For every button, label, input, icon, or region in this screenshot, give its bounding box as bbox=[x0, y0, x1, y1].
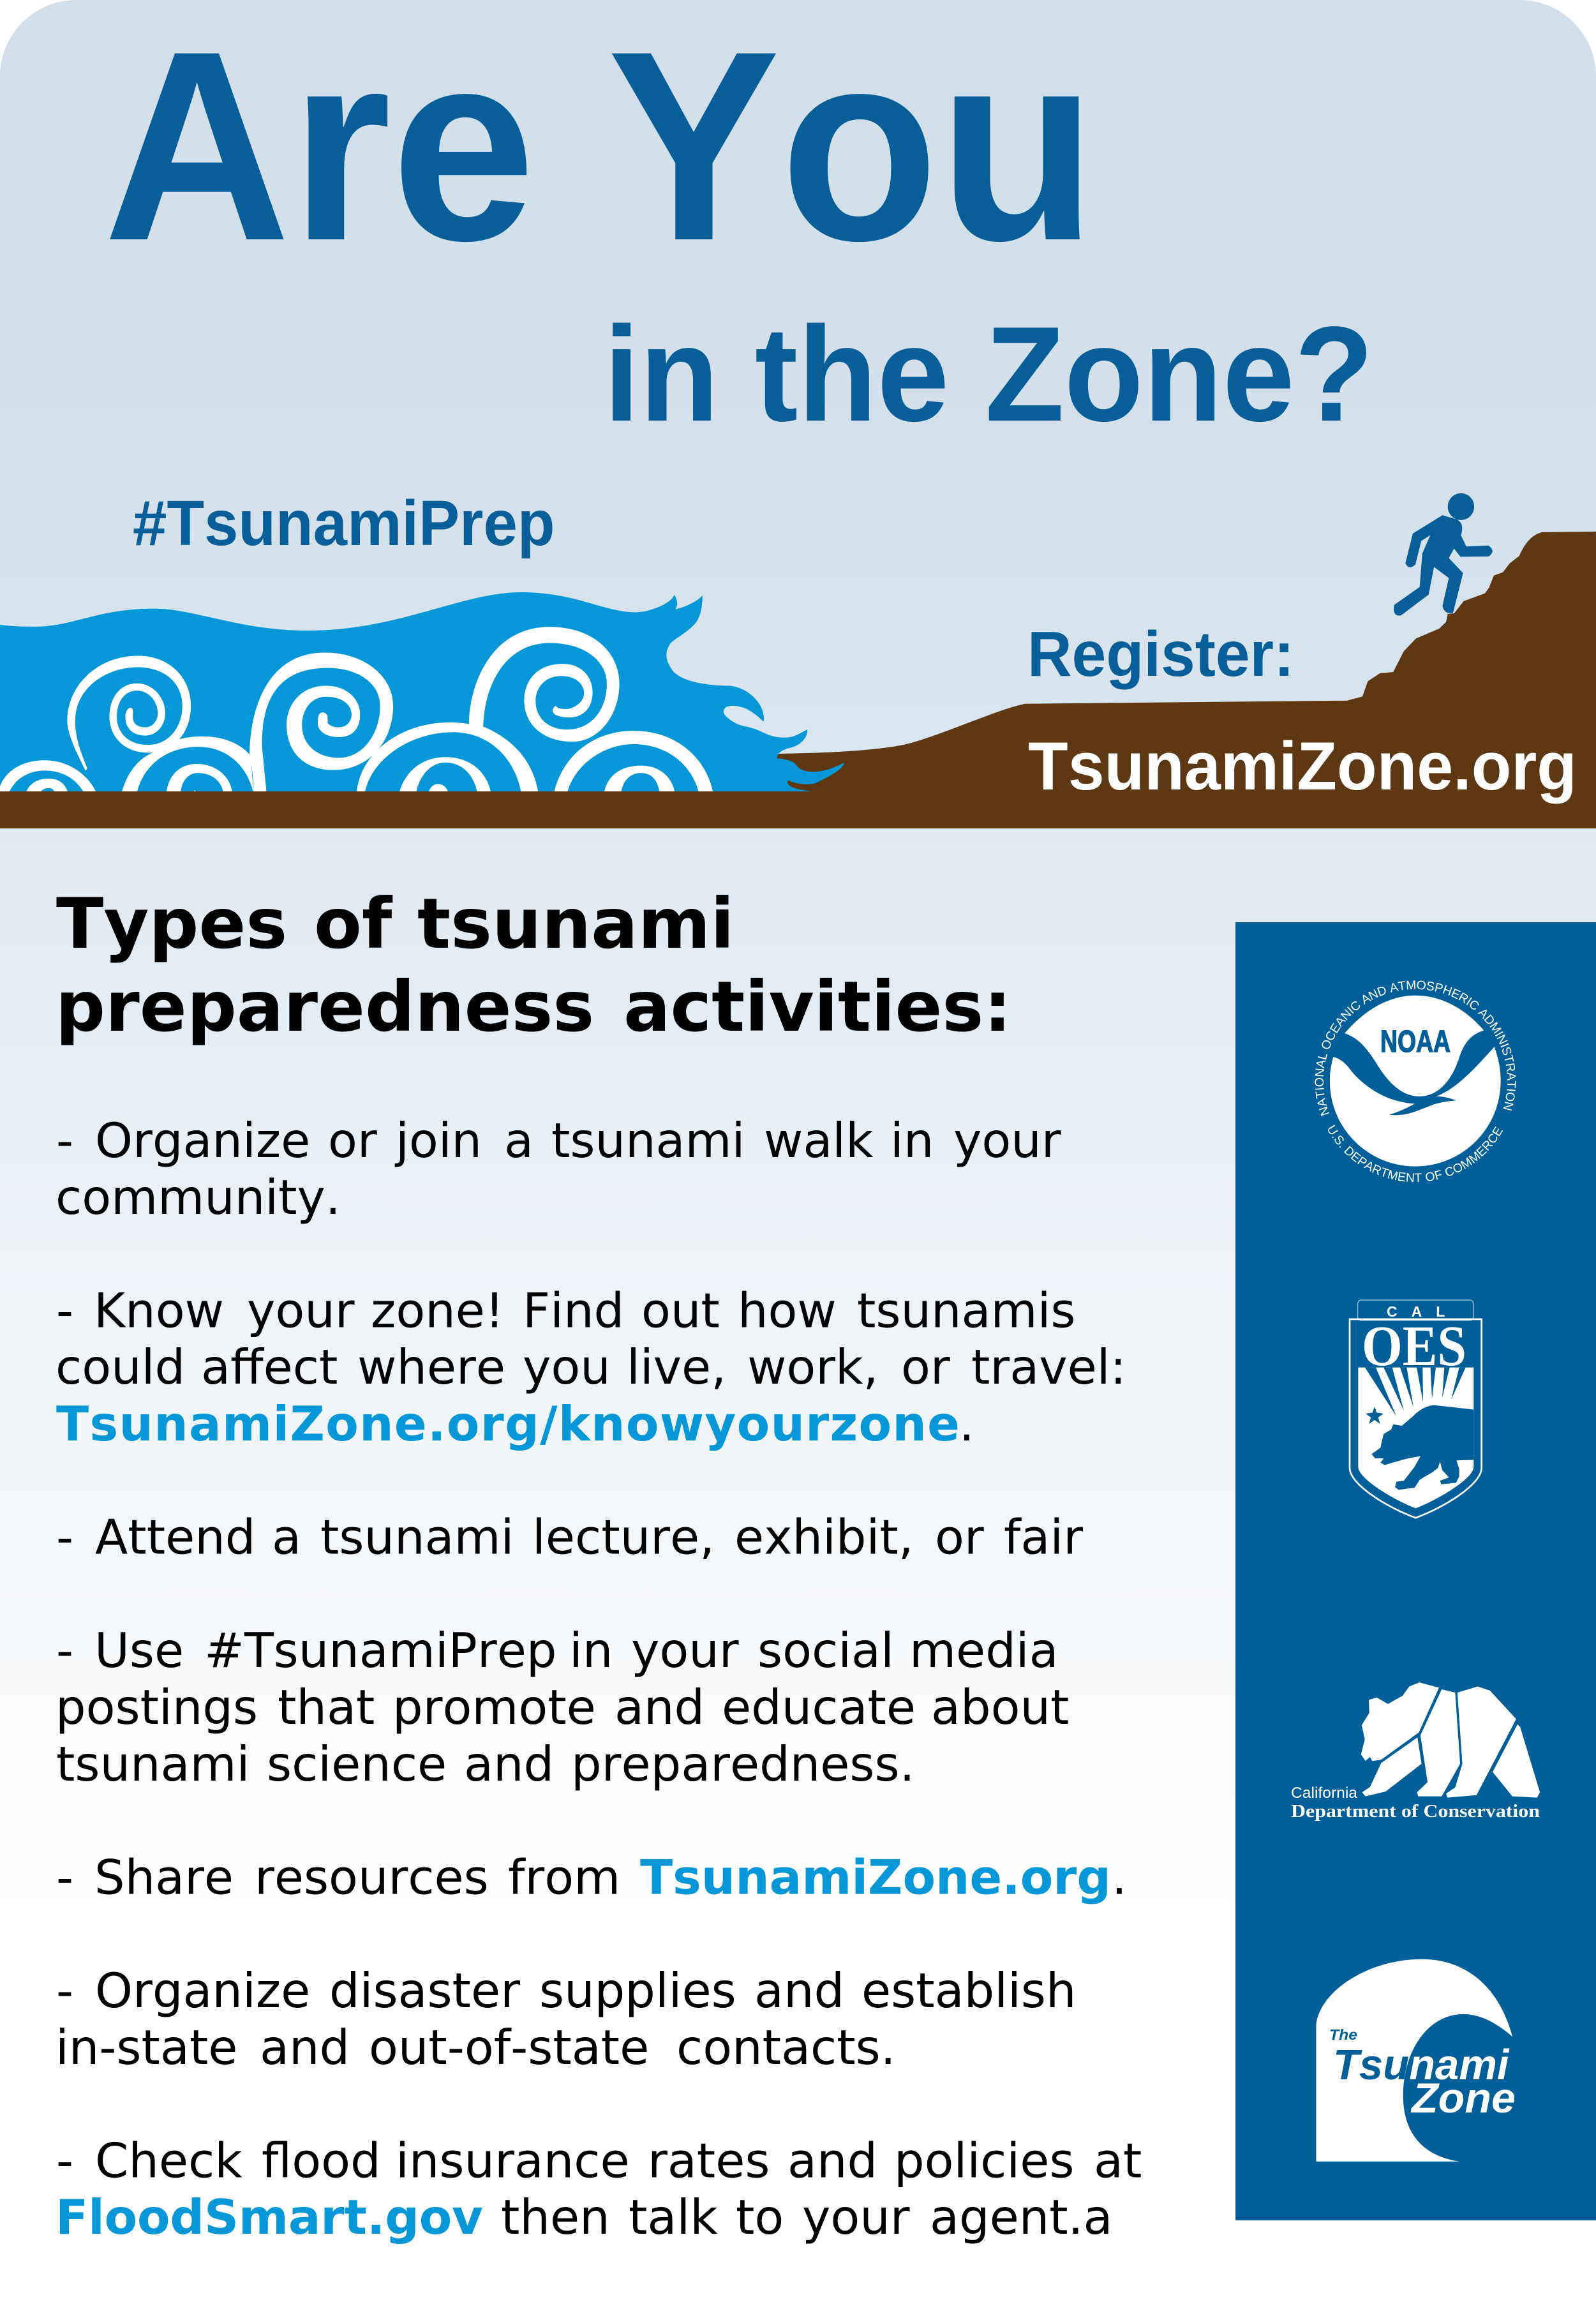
logo: The Tsunami Zone: Zone bbox=[1410, 2074, 1516, 2121]
activity: social media: media bbox=[909, 1622, 1059, 1679]
logo: The Tsunami Zone: The bbox=[1329, 2026, 1357, 2043]
activity: know your zone: live, bbox=[627, 1339, 726, 1395]
activity: social media: promote bbox=[392, 1679, 596, 1735]
activity: tsunami walk: Organize bbox=[95, 1112, 310, 1169]
activity: social media: preparedness. bbox=[571, 1736, 914, 1792]
title: in the Zone?: in the Zone? bbox=[604, 298, 1374, 449]
activity: know your zone: your bbox=[247, 1282, 355, 1338]
activity: social media bbox=[56, 1622, 1069, 1792]
activity: flood insurance bbox=[56, 2132, 1142, 2245]
activity: social media: and bbox=[464, 1736, 554, 1792]
activity: social media: in bbox=[569, 1622, 613, 1679]
activity: tsunami walk: join bbox=[394, 1112, 482, 1169]
activity: flood insurance: FloodSmart.gov bbox=[56, 2189, 483, 2245]
activity: social media: Use bbox=[94, 1622, 184, 1679]
activity: disaster supplies: in-state bbox=[56, 2019, 237, 2075]
activity: know your zone: tsunamis bbox=[857, 1282, 1075, 1338]
activity: social media: postings bbox=[56, 1679, 258, 1735]
logo: The Tsunami Zone bbox=[1316, 1959, 1516, 2162]
logo: NOAA: NATIONAL OCEANIC AND ATMOSPHERIC ADMINISTRATION bbox=[1315, 980, 1516, 1116]
activity: flood insurance: then bbox=[501, 2189, 610, 2245]
activity: share resources: from bbox=[508, 1849, 620, 1905]
heading: types of activities: Types bbox=[56, 883, 287, 964]
icon: running person bbox=[1394, 493, 1493, 615]
activity: disaster supplies bbox=[56, 1963, 1076, 2075]
activity: disaster supplies: - bbox=[56, 1963, 73, 2019]
activity: social media: social bbox=[757, 1622, 894, 1679]
activity: tsunami walk: a bbox=[504, 1112, 533, 1169]
activity: lecture or fair: Attend bbox=[95, 1509, 255, 1566]
activity: know your zone: zone! bbox=[371, 1282, 504, 1338]
activity: tsunami walk: in bbox=[890, 1112, 934, 1169]
activity: flood insurance: to bbox=[736, 2189, 784, 2245]
activity: know your zone: where bbox=[357, 1339, 505, 1395]
activity: share resources: . bbox=[1112, 1849, 1127, 1905]
activity: lecture or fair: lecture, bbox=[532, 1509, 715, 1566]
register label: Register: bbox=[1027, 618, 1294, 689]
activity: tsunami walk: tsunami bbox=[551, 1112, 745, 1169]
heading: types of activities: activities: bbox=[623, 966, 1011, 1047]
activity: know your zone: could bbox=[56, 1339, 185, 1395]
activity: lecture or fair: fair bbox=[1004, 1509, 1083, 1566]
hillside bbox=[766, 532, 1596, 828]
activity: tsunami walk: community. bbox=[56, 1169, 341, 1225]
activity: disaster supplies: disaster bbox=[329, 1963, 520, 2019]
logo: California Department of Conservation bbox=[1291, 1682, 1540, 1821]
activity: flood insurance: flood bbox=[262, 2132, 381, 2188]
activity: flood insurance: and bbox=[787, 2132, 877, 2188]
activity: social media: about bbox=[931, 1679, 1069, 1735]
activity: social media: and bbox=[615, 1679, 705, 1735]
activity: tsunami walk: - bbox=[56, 1112, 73, 1169]
activity: social media: science bbox=[267, 1736, 447, 1792]
website on hillside: TsunamiZone.org bbox=[1028, 728, 1577, 804]
activity: share resources: - bbox=[56, 1849, 73, 1905]
logo: California Department of Conservation: Department of Conservation bbox=[1291, 1801, 1540, 1821]
activity: know your zone: - bbox=[56, 1282, 73, 1338]
activity: share resources: resources bbox=[255, 1849, 489, 1905]
activity: tsunami walk: walk bbox=[764, 1112, 874, 1169]
activity: disaster supplies: and bbox=[754, 1963, 844, 2019]
activity: know your zone: work, bbox=[747, 1339, 878, 1395]
hashtag: #TsunamiPrep bbox=[133, 487, 555, 558]
activity: flood insurance: - bbox=[56, 2132, 73, 2188]
heading: types of activities: preparedness bbox=[56, 966, 594, 1047]
activity: know your zone: TsunamiZone.org/knowyourzone bbox=[56, 1396, 960, 1452]
activity: lecture or fair: or bbox=[935, 1509, 984, 1566]
activity: flood insurance: rates bbox=[648, 2132, 770, 2188]
activity: flood insurance: Check bbox=[95, 2132, 242, 2188]
activity: social media: #TsunamiPrep bbox=[204, 1622, 556, 1679]
wave with white spirals bbox=[0, 592, 844, 794]
activities list bbox=[56, 1112, 1142, 2245]
activity: social media: tsunami bbox=[56, 1736, 250, 1792]
activity: flood insurance: talk bbox=[629, 2189, 718, 2245]
panel: partner logos bbox=[1235, 922, 1596, 2220]
activity: tsunami walk: or bbox=[328, 1112, 377, 1169]
activity: know your zone: Know bbox=[94, 1282, 224, 1338]
logo: NOAA: NOAA bbox=[1380, 1025, 1451, 1059]
activity: know your zone: or bbox=[901, 1339, 950, 1395]
activity: disaster supplies: supplies bbox=[539, 1963, 736, 2019]
activity: know your zone: you bbox=[523, 1339, 611, 1395]
activity: disaster supplies: and bbox=[260, 2019, 350, 2075]
activity: tsunami walk bbox=[56, 1112, 1061, 1225]
activity: disaster supplies: out-of-state bbox=[369, 2019, 649, 2075]
activity: share resources: TsunamiZone.org bbox=[640, 1849, 1111, 1905]
logo: Cal OES bbox=[1350, 1300, 1482, 1518]
activity: lecture or fair: a bbox=[272, 1509, 301, 1566]
activity: share resources: Share bbox=[94, 1849, 234, 1905]
logo: Cal OES: OES bbox=[1362, 1315, 1466, 1378]
activity: know your zone: out bbox=[641, 1282, 720, 1338]
activity: lecture or fair: exhibit, bbox=[735, 1509, 914, 1566]
logo: The Tsunami Zone: Tsunami bbox=[1333, 2041, 1510, 2089]
activity: flood insurance: your bbox=[802, 2189, 910, 2245]
heading: types of activities bbox=[56, 883, 1011, 1047]
activity: know your zone: travel: bbox=[971, 1339, 1126, 1395]
logo: NOAA: U.S. DEPARTMENT OF COMMERCE bbox=[1328, 1125, 1503, 1182]
logo: California Department of Conservation: California bbox=[1291, 1784, 1358, 1802]
heading: types of activities: of bbox=[314, 883, 393, 964]
logo: NOAA bbox=[1315, 980, 1516, 1182]
heading: types of activities: tsunami bbox=[417, 883, 735, 964]
activity: social media: your bbox=[631, 1622, 739, 1679]
activity: lecture or fair: - bbox=[56, 1509, 73, 1566]
activity: flood insurance: at bbox=[1094, 2132, 1142, 2188]
activity: know your zone: . bbox=[959, 1396, 974, 1452]
activity: social media: - bbox=[56, 1622, 73, 1679]
activity: know your zone: how bbox=[738, 1282, 837, 1338]
activity: lecture or fair: tsunami bbox=[320, 1509, 514, 1566]
activity: flood insurance: insurance bbox=[396, 2132, 630, 2188]
activity: disaster supplies: establish bbox=[861, 1963, 1076, 2019]
activity: disaster supplies: Organize bbox=[95, 1963, 310, 2019]
activity: know your zone: Find bbox=[523, 1282, 624, 1338]
ground band bbox=[0, 791, 1596, 828]
activity: flood insurance: agent.a bbox=[930, 2189, 1112, 2245]
activity: disaster supplies: contacts. bbox=[676, 2019, 896, 2075]
activity: social media: that bbox=[278, 1679, 375, 1735]
activity: flood insurance: policies bbox=[894, 2132, 1074, 2188]
activity: know your zone: affect bbox=[201, 1339, 338, 1395]
activity: know your zone bbox=[56, 1282, 1126, 1452]
title: Are You: Are You bbox=[103, 0, 1097, 297]
activity: social media: educate bbox=[722, 1679, 916, 1735]
logo: Cal OES: CAL bbox=[1387, 1303, 1459, 1320]
activity: tsunami walk: your bbox=[953, 1112, 1061, 1169]
